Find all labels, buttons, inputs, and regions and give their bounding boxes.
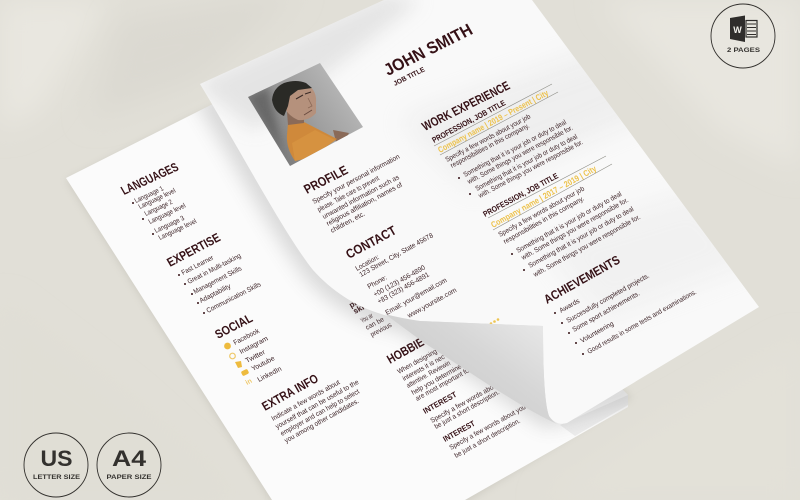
section: partly hidden skills text (343, 289, 394, 339)
section: languages: Language 3 (153, 215, 186, 235)
job entry 1: PROFESSION, JOB TITLE (430, 98, 508, 145)
section: contact: 123 Street, City, State 45678 (359, 232, 435, 279)
section: profile: please. Take care to prevent (316, 175, 381, 214)
badge: US letter size (24, 433, 88, 497)
section: hobbies: attentive. Reviewin (406, 360, 452, 390)
section: languages: Language level (147, 203, 188, 226)
section: extra info: employer and can help to select (280, 388, 361, 438)
paper shading: soft shadows (202, 0, 618, 171)
section: social: Twitter (244, 349, 267, 365)
section: partly hidden skills text: pr (347, 298, 359, 310)
section: contact: www.yoursite.com (406, 287, 458, 320)
job entry 1: with. Some things you were responsible for. (466, 125, 574, 186)
badge: A4 paper size (97, 433, 161, 497)
arm (333, 130, 349, 142)
section: hobbies: HOBBIE (385, 335, 426, 367)
badge: US letter size: LETTER SIZE (33, 474, 81, 481)
section: contact: Location: (355, 254, 381, 273)
face (286, 88, 316, 120)
section: hobbies (385, 335, 527, 460)
job entry 2: Company name | 2017 – 2019 | City (489, 163, 598, 230)
section: languages: Language 1 (133, 185, 165, 205)
badge: Word 2 pages: 2 PAGES (727, 47, 761, 54)
section: expertise: Communication Skills (205, 281, 263, 315)
job title: JOB TITLE (392, 66, 427, 88)
job entry 1: with. Some things you were responsible for. (477, 139, 585, 200)
job entry 2: with. Some things you were responsible for. (520, 197, 630, 262)
section: partly hidden skills text: C (343, 289, 353, 300)
icon: facebook (224, 343, 231, 349)
section: profile: PROFILE (301, 162, 351, 197)
section: expertise: EXPERTISE (164, 231, 223, 270)
section: achievements: Successfully completed projects. (565, 273, 651, 325)
job entry 2 (481, 156, 642, 279)
section: profile (301, 154, 404, 235)
hair (272, 81, 312, 116)
section: extra info: Indicate a few words about (271, 379, 341, 423)
section: achievements: ACHIEVEMENTS (541, 253, 622, 307)
job entry 2: PROFESSION, JOB TITLE (481, 171, 560, 219)
section: languages: Language level (157, 218, 198, 242)
section: extra info: yourself that can be useful to the (275, 379, 360, 431)
job entry 2: with. Some things you were responsible for. (532, 214, 642, 279)
section: profile: children, etc. (329, 211, 366, 235)
section: achievements: Good results in some tests and examinations. (586, 289, 698, 356)
section: partly hidden skills text: can be (364, 316, 386, 332)
section: expertise: Adaptability (198, 283, 233, 305)
section: contact: +00 (123) 456-4890 (373, 264, 427, 299)
panel: front resume page (195, 0, 760, 424)
section: profile: unwanted information such as (321, 174, 401, 221)
edge of third sheet (560, 395, 628, 436)
section: contact: CONTACT (343, 223, 399, 262)
section: contact: +83 (323) 456-4891 (377, 271, 431, 306)
job entry 1: Company name | 2019 – Present | City (436, 88, 550, 155)
section: partly hidden skills text: previous (369, 322, 394, 339)
section: expertise: Fast Learner (180, 254, 216, 277)
icon: youtube (241, 369, 249, 376)
job entry 1: Something that it is your job or duty to deal (462, 119, 568, 179)
section: expertise: Great in Multi-tasking (186, 253, 243, 286)
section: contact: Phone: (367, 274, 388, 291)
job entry 1: Something that it is your job or duty to deal (474, 133, 579, 193)
section: extra info (260, 371, 361, 445)
section: hobbies: Specify a few words abo (430, 384, 495, 425)
shirt (287, 121, 337, 161)
section: languages: Language level (137, 188, 178, 211)
yellow dots peeking above curl (490, 318, 499, 325)
section: achievements: Some sport achievements. (571, 290, 641, 334)
icon: linkedin: in (244, 378, 254, 387)
section: languages (119, 160, 198, 242)
section: social: LinkedIn (256, 366, 283, 384)
icon: Word document: W (733, 25, 742, 35)
job entry 2: Specify a few words about your job (498, 186, 586, 239)
section: social: Facebook (232, 328, 261, 347)
section: achievements: Awards (558, 298, 582, 315)
section: extra info: EXTRA INFO (260, 371, 321, 414)
job entry 1: Specify a few words about your job (444, 113, 532, 164)
section: partly hidden skills text: You ar (359, 312, 375, 325)
section: achievements: Volunteering (579, 320, 615, 345)
badge: A4 paper size: A4 (112, 446, 147, 471)
job entry 2: responsibilities in this company. (503, 196, 586, 246)
section: partly hidden skills text: ski (351, 303, 366, 316)
section: contact: Email: your@email.com (385, 277, 449, 317)
section: hobbies: When designing (397, 348, 439, 376)
name heading: JOHN SMITH (380, 20, 476, 79)
icon: twitter (235, 361, 242, 368)
badge: A4 paper size: PAPER SIZE (106, 474, 152, 481)
job entry 1 (430, 84, 585, 200)
section: extra info: you among other candidates. (284, 398, 361, 445)
section: hobbies: be just a short description. (434, 389, 501, 431)
badge: Word 2 pages (711, 4, 775, 68)
section: languages: LANGUAGES (119, 160, 181, 198)
badge: US letter size: US (40, 446, 72, 471)
shadow cast by curled front page (192, 90, 650, 428)
icon: instagram (230, 353, 235, 359)
section: work experience heading: WORK EXPERIENCE (419, 79, 512, 134)
section: social: Youtube (250, 355, 276, 373)
section: hobbies: are most important fo (415, 368, 471, 403)
section: social (212, 311, 283, 387)
section: languages: Language 2 (143, 199, 174, 218)
section: expertise: Management Skills (192, 265, 244, 296)
section: hobbies: be just a short description. (454, 418, 522, 460)
page curl flap (385, 314, 557, 424)
shadow under back page (66, 62, 632, 500)
section: hobbies: interests it is nec (402, 354, 447, 383)
section: contact (343, 223, 458, 320)
section: hobbies: help you determine (411, 363, 463, 397)
job entry 1: responsibilities in this company. (449, 123, 531, 170)
neck (287, 112, 304, 125)
section: profile: religious affiliation, names of (325, 182, 404, 228)
job entry 2: Something that it is your job or duty to deal (516, 191, 623, 255)
section: expertise (164, 231, 263, 315)
section: hobbies: INTEREST (422, 390, 458, 416)
section: profile: Specify your personal information (311, 154, 401, 206)
photo: portrait of man in orange shirt (248, 63, 363, 166)
panel: back resume page (66, 60, 628, 500)
section: social: Instagram (238, 335, 270, 356)
section: social: SOCIAL (212, 311, 255, 342)
section: hobbies: Specify a few words about you (449, 404, 527, 452)
job entry 2: Something that it is your job or duty to deal (528, 206, 635, 270)
section: achievements (541, 253, 698, 356)
section: hobbies: INTEREST (442, 419, 477, 444)
